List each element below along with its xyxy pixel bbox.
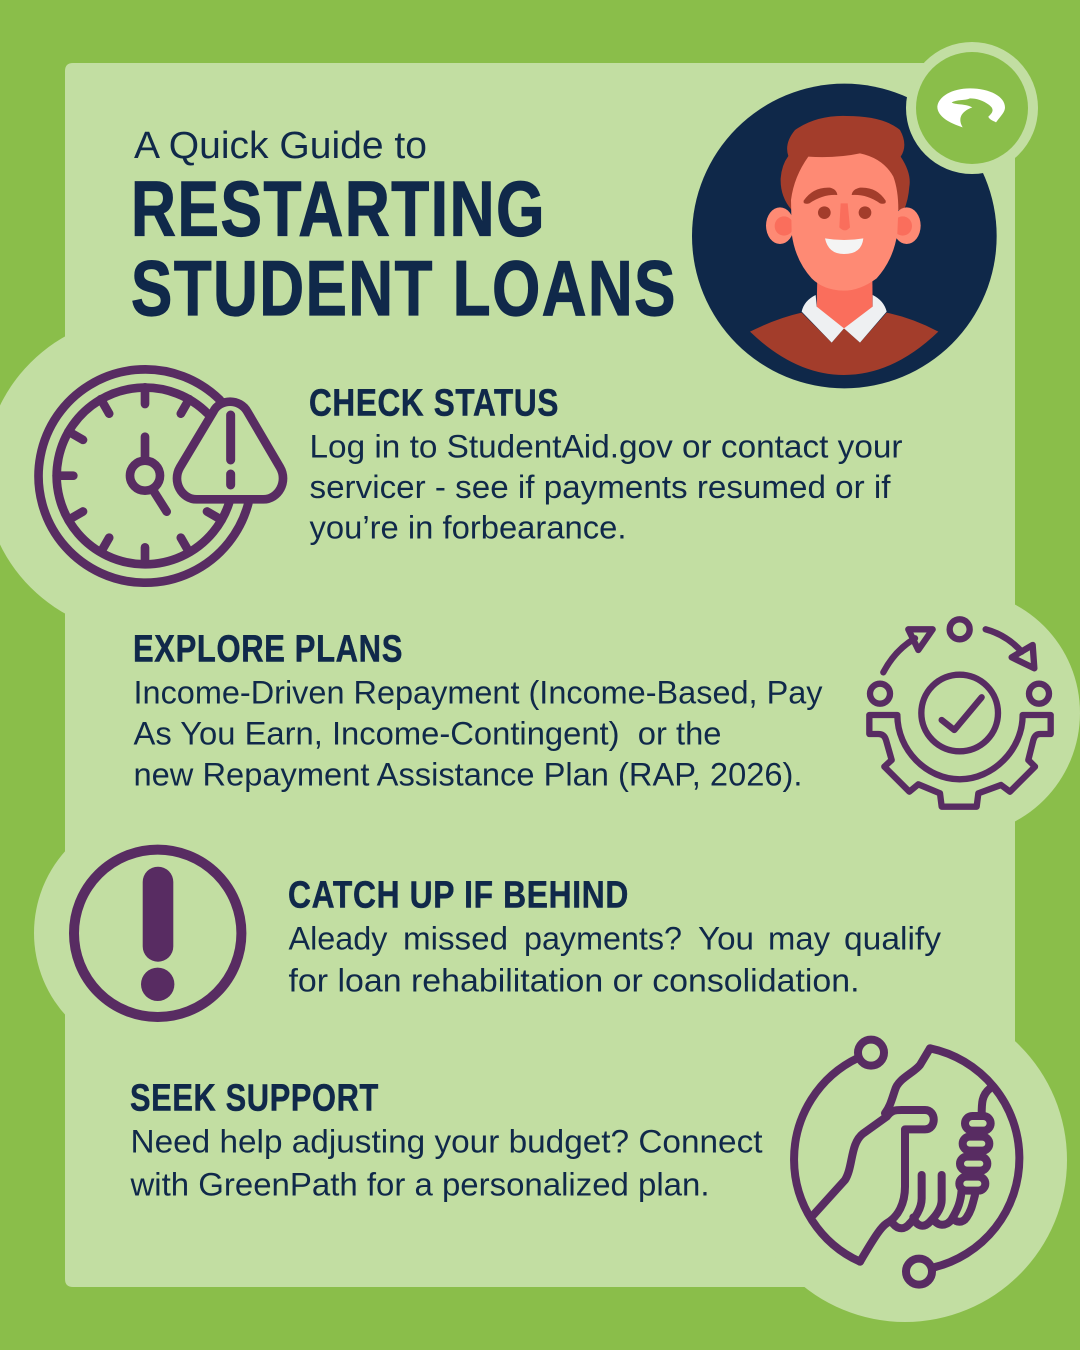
step: explore plans: EXPLORE PLANS bbox=[133, 628, 403, 670]
step: catch up if behind: qualify bbox=[844, 920, 941, 956]
step: catch up if behind: Aleady bbox=[288, 920, 388, 956]
step: explore plans bbox=[133, 628, 822, 792]
step: explore plans: As You Earn, Income-Contingent) or the bbox=[134, 716, 722, 752]
step: catch up if behind bbox=[288, 874, 941, 998]
step: check status: Log in to StudentAid.gov or contact your bbox=[310, 428, 903, 464]
step: catch up if behind: for loan rehabilitation or consolidation. bbox=[288, 962, 860, 998]
logo badge bbox=[906, 42, 1038, 174]
title bbox=[131, 125, 677, 332]
step: check status: CHECK STATUS bbox=[309, 382, 559, 424]
step: catch up if behind: CATCH UP IF BEHIND bbox=[288, 874, 629, 916]
step: seek support bbox=[129, 1078, 763, 1202]
icon: handshake in circle bbox=[794, 1040, 1019, 1285]
illustration: smiling student avatar bbox=[692, 84, 997, 388]
title: A Quick Guide to bbox=[134, 125, 427, 167]
step: catch up if behind: payments? bbox=[524, 920, 682, 956]
step: catch up if behind: You bbox=[698, 920, 754, 956]
step: check status: servicer - see if payments resumed or if bbox=[310, 469, 891, 505]
step: catch up if behind: may bbox=[768, 920, 830, 956]
step: seek support: SEEK SUPPORT bbox=[130, 1078, 379, 1120]
step: explore plans: Income-Driven Repayment (Income-Based, Pay bbox=[134, 674, 822, 710]
step: explore plans: new Repayment Assistance Plan (RAP, 2026). bbox=[134, 756, 802, 792]
step: catch up if behind: missed bbox=[403, 920, 508, 956]
title: RESTARTING bbox=[131, 164, 546, 252]
icon: gear with check mark and cycle arrows bbox=[869, 619, 1051, 807]
step: check status: you’re in forbearance. bbox=[310, 510, 626, 546]
step: check status bbox=[309, 382, 903, 546]
step: seek support: with GreenPath for a personalized plan. bbox=[129, 1166, 709, 1202]
step: seek support: Need help adjusting your budget? Connect bbox=[130, 1124, 763, 1160]
icon: exclamation in circle bbox=[74, 850, 241, 1017]
title: STUDENT LOANS bbox=[131, 244, 677, 332]
icon: clock with warning triangle bbox=[39, 369, 283, 583]
